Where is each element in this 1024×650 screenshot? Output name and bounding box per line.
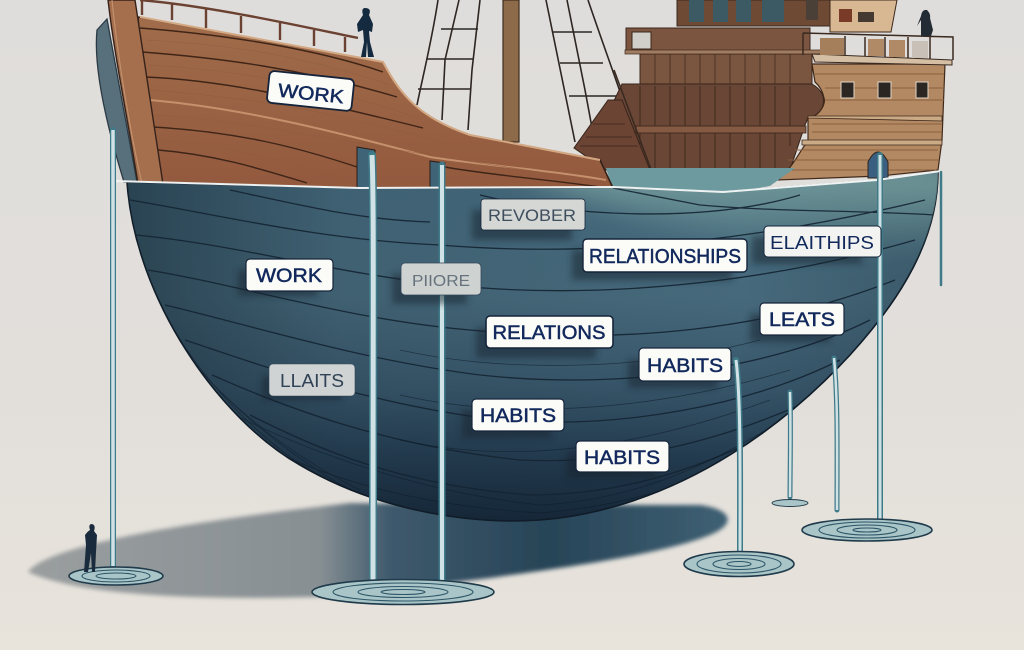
label: work on deck bbox=[267, 71, 354, 111]
bow railing bbox=[140, 0, 358, 52]
label: work on deck: WORK bbox=[277, 81, 345, 108]
figure: person on ground bbox=[84, 524, 97, 572]
submerged hull bbox=[126, 172, 939, 522]
label: llaits: LLAITS bbox=[280, 371, 344, 391]
label: revober: REVOBER bbox=[488, 206, 576, 225]
label: relationships: RELATIONSHIPS bbox=[589, 246, 741, 268]
figure: person on stern bbox=[917, 10, 933, 36]
label: habits center: HABITS bbox=[647, 356, 723, 377]
label: elaithips bbox=[764, 226, 881, 257]
stern railing bbox=[803, 33, 953, 60]
water puddles bbox=[69, 500, 932, 604]
leak openings bbox=[357, 147, 375, 190]
label: faded more bbox=[401, 263, 481, 295]
label: faded more: PIIORE bbox=[412, 273, 470, 290]
stern cabin bbox=[778, 64, 945, 180]
bow blue sliver bbox=[96, 19, 137, 182]
label: habits lower bbox=[576, 441, 669, 472]
label: habits left: HABITS bbox=[480, 406, 556, 427]
label: habits lower: HABITS bbox=[584, 448, 660, 469]
label: relationships bbox=[583, 239, 747, 272]
deck water bbox=[606, 168, 795, 194]
label: revober bbox=[481, 199, 585, 230]
label: leats: LEATS bbox=[769, 310, 835, 331]
label: relations: RELATIONS bbox=[492, 323, 606, 344]
figure: person on deck bbox=[357, 8, 374, 57]
label: elaithips: ELAITHIPS bbox=[770, 233, 874, 253]
upper bow hull bbox=[108, 0, 613, 190]
labels bbox=[246, 71, 881, 472]
waterline bbox=[114, 171, 941, 192]
leaking water streams bbox=[113, 130, 941, 585]
stem post bbox=[108, 0, 163, 184]
label: work hull bbox=[246, 259, 333, 291]
doorway leak bbox=[868, 152, 888, 178]
masts and rigging bbox=[417, 0, 633, 160]
label: relations bbox=[486, 316, 613, 348]
ground shadow bbox=[28, 503, 728, 598]
label: habits center bbox=[639, 348, 731, 381]
label: llaits bbox=[269, 364, 355, 396]
label shadows bbox=[238, 210, 862, 478]
label: work hull: WORK bbox=[256, 266, 322, 287]
label: leats bbox=[760, 303, 844, 335]
ship superstructure bbox=[574, 0, 953, 180]
label: habits left bbox=[472, 399, 564, 431]
